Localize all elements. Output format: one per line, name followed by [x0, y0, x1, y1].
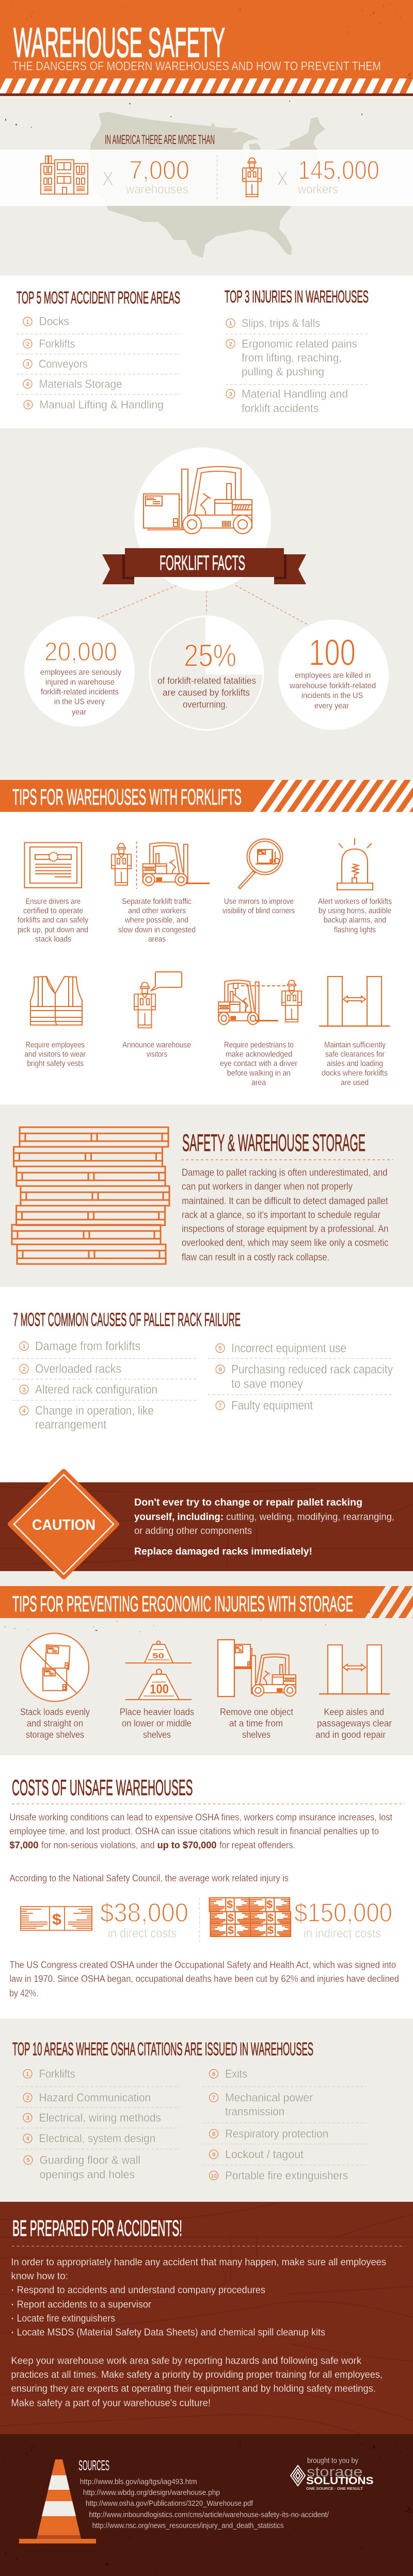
- icon: forklift with box: [144, 467, 252, 534]
- item 5: Incorrect equipment use: [231, 1341, 346, 1355]
- item 9: 9: [212, 2152, 215, 2158]
- header: [0, 0, 413, 135]
- tip: clearances: docks where forklifts: [322, 1069, 388, 1078]
- checklist: Locate MSDS (Material Safety Data Sheets) and chemical spill cleanup kits: [17, 2327, 325, 2338]
- item 8: 8: [212, 2131, 215, 2137]
- item 3: 3: [26, 2115, 29, 2121]
- item 2: pulling & pushing: [242, 365, 324, 378]
- tip: eye contact: eye contact with a driver: [220, 1059, 298, 1068]
- item 4: 4: [22, 1408, 26, 1414]
- tip: certification: pick up, put down and: [18, 926, 88, 934]
- item 4: Change in operation, like: [35, 1404, 154, 1418]
- tip: safety vests: and visitors to wear: [25, 1050, 86, 1059]
- item 7: Mechanical power: [225, 2091, 313, 2104]
- list: accident prone areas: [17, 315, 180, 411]
- item 1: 1: [229, 321, 232, 327]
- panel: safety and warehouse storage: [12, 1127, 393, 1264]
- item 6: Exits: [225, 2068, 247, 2080]
- brought to you by: brought to you by: [307, 2456, 358, 2465]
- tip: one object at a time: Remove one object: [220, 1707, 293, 1717]
- multiply sign: X: [277, 168, 288, 190]
- item 7: transmission: [225, 2105, 284, 2118]
- caution text: yourself, including:: [134, 1512, 224, 1523]
- sources list: [80, 2477, 329, 2530]
- fact: 25% pie: [150, 614, 267, 730]
- item 5: 5: [26, 2157, 30, 2164]
- item 1: [23, 2068, 75, 2080]
- item 1: Slips, trips & falls: [242, 317, 320, 329]
- icon: stack of pallets: [12, 1127, 169, 1264]
- tip: clearances: [319, 977, 390, 1087]
- icon: worker: [243, 158, 261, 197]
- tip: stack evenly: [20, 1633, 90, 1740]
- fact: 20,000: in the US every: [54, 698, 105, 706]
- paragraph: keep safe: practices at all times. Make safety a priority by providing proper training for all employees,: [11, 2370, 383, 2380]
- fact: 100: employees are killed in: [295, 671, 371, 680]
- item 5: [24, 2153, 140, 2181]
- fact: 20,000: 20,000: [44, 637, 117, 666]
- item 2: [226, 338, 357, 378]
- icon: weights: 100: [150, 1682, 169, 1697]
- item 2: 2: [229, 341, 232, 347]
- sources list: http://www.osha.gov/Publications/3220_Warehouse.pdf: [86, 2499, 253, 2508]
- item 9: Lockout / tagout: [225, 2148, 304, 2161]
- tip: mirrors: visibility of blind corners: [223, 906, 295, 916]
- tip: certification: certified to operate: [23, 906, 83, 916]
- tip: alarms: flashing lights: [334, 926, 376, 934]
- paragraph: keep safe: Make safety a part of your warehouse's culture!: [11, 2398, 211, 2409]
- divider: [199, 1898, 200, 1943]
- item 4: Materials Storage: [39, 378, 122, 390]
- tip: clearances: are used: [341, 1079, 369, 1087]
- header rule: [0, 93, 413, 96]
- icon: dollar bill: $: [52, 1911, 61, 1928]
- fact: 100: warehouse forklift-related: [289, 681, 376, 691]
- panel: forklift facts: [24, 447, 389, 730]
- paragraph: OSHA fines: up to $70,000: [157, 1840, 216, 1850]
- panel: costs of unsafe warehouses: COSTS OF UNSAFE WAREHOUSES: [12, 1775, 193, 1800]
- item 3: 3: [229, 391, 232, 397]
- item 7: [210, 2091, 313, 2118]
- tip: certification: [18, 842, 88, 943]
- paragraph: pallet racking: [182, 1167, 388, 1263]
- divider: [217, 155, 218, 200]
- fact: 20,000: injured in warehouse: [45, 678, 115, 686]
- checklist: Respond to accidents and understand company procedures: [17, 2285, 265, 2296]
- caution sign: CAUTION: [32, 1517, 96, 1533]
- panel: be prepared: BE PREPARED FOR ACCIDENTS!: [12, 2216, 182, 2241]
- item 5: 5: [26, 402, 30, 408]
- tip: certification: forklifts and can safely: [18, 916, 88, 925]
- item 2: 2: [26, 341, 29, 347]
- tip: heavier loads: on lower or middle: [122, 1718, 192, 1729]
- item 3: forklift accidents: [242, 402, 319, 415]
- item 1: Docks: [39, 315, 69, 328]
- heading: accident prone areas: TOP 5 MOST ACCIDENT PRONE AREAS: [17, 288, 180, 307]
- connector lines: [98, 585, 310, 626]
- logo: Storage Solutions: SOLUTIONS: [306, 2475, 374, 2487]
- icon: weights: 50: [152, 1652, 164, 1660]
- banner: ergonomic tips: [0, 1586, 413, 1632]
- item 2: Ergonomic related pains: [242, 338, 357, 350]
- list: causes right: [208, 1341, 393, 1413]
- panel: forklift tips: [0, 812, 413, 1105]
- fact: 100: 100: [309, 632, 356, 674]
- icon: stack of dollar bills: $: [227, 1899, 233, 1911]
- icon: worker and forklift separated: [112, 841, 210, 889]
- map of the USA: [88, 112, 325, 258]
- fact: 100: every year: [314, 702, 350, 710]
- paragraph: OSHA fines: $7,000: [9, 1840, 38, 1850]
- icon: stack of dollar bills: $: [228, 1925, 234, 1937]
- icon: stack of dollar bills: [210, 1898, 291, 1937]
- tip: separate traffic: where possible, and: [124, 916, 188, 925]
- tip: alarms: backup alarms, and: [324, 916, 386, 925]
- paragraph: keep safe: [11, 2356, 383, 2409]
- icon: dollar bill: [21, 1907, 92, 1930]
- panel: OSHA citations: [12, 2039, 367, 2182]
- item 4: 4: [26, 381, 29, 388]
- tip: heavier loads: [120, 1641, 194, 1740]
- panel: top lists: [0, 276, 413, 428]
- item 3: 3: [26, 361, 29, 367]
- icon: warehouse building: [41, 156, 88, 194]
- paragraph: OSHA history: by 42%.: [9, 1988, 38, 1998]
- panel: costs of unsafe warehouses: [0, 1755, 413, 2019]
- logo: Storage Solutions: ONE SOURCE · ONE RESULT: [306, 2486, 363, 2491]
- checklist: Report accidents to a supervisor: [17, 2299, 152, 2310]
- paragraph: pallet racking: Damage to pallet racking is often underestimated, and: [182, 1167, 387, 1178]
- item 6: [210, 2068, 247, 2080]
- tip: one object at a time: at a time from: [229, 1718, 283, 1729]
- tip: eye contact: [218, 980, 301, 1087]
- number: 7,000: 7,000: [129, 155, 189, 185]
- caution text: Replace damaged racks immediately!: [134, 1546, 312, 1557]
- tip: mirrors: Use mirrors to improve: [224, 897, 294, 906]
- multiply sign: X: [102, 168, 114, 190]
- tip: heavier loads: Place heavier loads: [120, 1707, 194, 1717]
- caution text: Don't ever try to change or repair pallet racking: [134, 1497, 362, 1508]
- item 5: 5: [218, 1346, 222, 1352]
- item 5: Manual Lifting & Handling: [39, 398, 164, 411]
- icon: forklift driver making eye contact with pedestrian: [218, 980, 301, 1025]
- caution text: [134, 1497, 394, 1557]
- tip: separate traffic: slow down in congested: [118, 926, 196, 934]
- item 8: Respiratory protection: [225, 2127, 328, 2140]
- item 1: Forklifts: [39, 2068, 75, 2080]
- item 4: rearrangement: [35, 1418, 106, 1432]
- icon: stack of dollar bills: $: [267, 1925, 274, 1937]
- caution sign: [10, 1471, 117, 1577]
- icon: traffic cone: [19, 2459, 96, 2543]
- icon: weights: [125, 1641, 192, 1700]
- item 6: Purchasing reduced rack capacity: [231, 1363, 393, 1377]
- list: citations left: [17, 2068, 180, 2181]
- tip: safety vests: Require employees: [26, 1041, 85, 1050]
- logo: Storage Solutions: [291, 2464, 374, 2491]
- number: direct cost: $38,000: [100, 1898, 188, 1927]
- caution text: cutting, welding, modifying, rearranging,: [226, 1512, 394, 1523]
- icon: magnifier: [239, 839, 283, 889]
- paragraph: employees know how to: In order to appropriately handle any accident that many happen, make sure all employees: [11, 2257, 386, 2268]
- icon: aisle clearance: [319, 1645, 390, 1694]
- stripes: [382, 1586, 413, 1618]
- paragraph: keep safe: ensuring they are experts at operating their equipment and by holding safety meetings.: [11, 2383, 376, 2394]
- paragraph: OSHA history: [9, 1960, 399, 1998]
- item 3: Altered rack configuration: [35, 1383, 157, 1397]
- item 3: Material Handling and: [242, 387, 348, 401]
- label: direct cost: in direct costs: [108, 1926, 177, 1941]
- tip: eye contact: before walking in an: [227, 1069, 291, 1078]
- tip: clearances: safe clearances for: [325, 1050, 385, 1059]
- tip: announce visitors: Announce warehouse: [122, 1041, 191, 1050]
- icon: stack of dollar bills: $: [228, 1912, 234, 1924]
- paragraph: OSHA fines: employee time, and lost product. OSHA can issue citations which result in financial penalties up to: [9, 1826, 379, 1836]
- caution text: or adding other components: [134, 1526, 252, 1537]
- label: workers: workers: [297, 182, 338, 197]
- icon: certificate: [25, 842, 82, 888]
- item 6: 6: [212, 2071, 215, 2077]
- panel: America stats: IN AMERICA THERE ARE MORE THAN: [105, 133, 215, 147]
- item 7: Faulty equipment: [231, 1399, 313, 1413]
- banner: forklift facts: [102, 548, 306, 584]
- tip: stack evenly: Stack loads evenly: [20, 1707, 90, 1717]
- tip: clearances: aisles and loading: [327, 1059, 383, 1068]
- paragraph: employees know how to: know how to:: [11, 2271, 68, 2282]
- sources list: http://www.wbdg.org/design/warehouse.php: [83, 2488, 220, 2497]
- item 4: [20, 1404, 154, 1432]
- panel: footer: [0, 2434, 413, 2576]
- list: injuries: [226, 317, 368, 415]
- tip: clear aisles: Keep aisles and: [324, 1707, 384, 1717]
- tip: alarms: by using horns, audible: [319, 906, 391, 916]
- banner: forklift facts: FORKLIFT FACTS: [160, 552, 245, 574]
- item 2: 2: [22, 1366, 26, 1372]
- text: National Safety Council: According to the National Safety Council, the average work related injury is: [9, 1873, 289, 1883]
- fact: 25% pie: are caused by forklifts: [163, 687, 250, 698]
- item 6: to save money: [231, 1377, 303, 1391]
- fact: 20,000: forklift-related incidents: [41, 687, 119, 697]
- tip: safety vests: bright safety vests: [27, 1059, 84, 1068]
- item 1: 1: [22, 1343, 26, 1350]
- item 5: Guarding floor & wall: [39, 2153, 140, 2167]
- item 2: from lifting, reaching,: [242, 351, 342, 364]
- tip: alarms: [318, 838, 392, 934]
- fact: 25% pie: 25%: [184, 638, 236, 673]
- icon: stack of dollar bills: $: [267, 1912, 274, 1924]
- tip: eye contact: area: [251, 1079, 266, 1087]
- tip: separate traffic: areas: [148, 935, 166, 943]
- stripes: [264, 780, 413, 812]
- item 2: Forklifts: [39, 338, 75, 350]
- tip: announce visitors: [122, 972, 191, 1059]
- tip: mirrors: [223, 839, 295, 916]
- icon: crooked boxes prohibited: [21, 1633, 89, 1701]
- fact: 100: [278, 619, 389, 730]
- tip: stack evenly: storage shelves: [26, 1730, 84, 1740]
- panel: pallet rack failure causes: [0, 1287, 413, 1482]
- tip: clear aisles: [315, 1645, 392, 1740]
- icon: safety vest: [30, 977, 82, 1025]
- checklist: [12, 2285, 325, 2338]
- circle behind forklift: [134, 447, 271, 591]
- sources list: http://www.bls.gov/iag/tgs/iag493.htm: [80, 2477, 197, 2486]
- label: warehouses: warehouses: [125, 182, 188, 197]
- item 2: Hazard Communication: [39, 2091, 151, 2104]
- item 1: 1: [26, 319, 29, 325]
- logo: Storage Solutions: storage: [307, 2464, 362, 2479]
- tip: clear aisles: and in good repair: [315, 1730, 386, 1740]
- paragraph: OSHA fines: for non-serious violations, and: [41, 1840, 155, 1850]
- tip: eye contact: Require pedestrians to: [224, 1041, 294, 1050]
- icon: worker with speech bubble: [134, 972, 182, 1028]
- item 1: [23, 315, 69, 328]
- item 3: 3: [22, 1387, 26, 1393]
- paragraph: pallet racking: can put workers in danger when not properly: [182, 1181, 353, 1192]
- paragraph: OSHA fines: for repeat offenders.: [219, 1840, 295, 1850]
- fact: 20,000: year: [72, 708, 87, 716]
- paragraph: pallet racking: maintained. It can be difficult to detect damaged pallet: [182, 1196, 388, 1207]
- item 6: [216, 1363, 393, 1391]
- item 2: [23, 338, 75, 350]
- paragraph: pallet racking: rack at a glance, so it's important to schedule regular: [182, 1210, 381, 1221]
- item 3: Conveyors: [39, 357, 88, 371]
- number: indirect cost: $150,000: [294, 1898, 392, 1927]
- fact: 100: incidents in the US: [301, 692, 363, 700]
- number: 145,000: 145,000: [298, 155, 379, 185]
- sources list: http://www.nsc.org/news_resources/injury_and_death_statistics: [92, 2521, 284, 2530]
- paragraph: pallet racking: flaw can result in a costly rack collapse.: [182, 1252, 329, 1263]
- paragraph: OSHA fines: [9, 1812, 392, 1850]
- item 3: Electrical, wiring methods: [39, 2111, 161, 2124]
- fact: 25% pie: of forklift-related fatalities: [157, 676, 256, 686]
- tip: certification: stack loads: [35, 935, 71, 943]
- icon: forklift at shelf: [218, 1640, 296, 1697]
- tip: eye contact: make acknowledged: [226, 1050, 292, 1059]
- list: citations right: [202, 2068, 367, 2182]
- tip: one object at a time: [218, 1640, 296, 1740]
- item 10: Portable fire extinguishers: [225, 2169, 348, 2182]
- item 6: 6: [218, 1367, 222, 1373]
- tip: separate traffic: Separate forklift traffic: [122, 897, 192, 906]
- tip: one object at a time: shelves: [242, 1730, 271, 1740]
- panel: caution: [0, 1471, 413, 1577]
- list: causes left: [12, 1339, 196, 1432]
- panel: footer: SOURCES: [78, 2457, 109, 2473]
- tip: alarms: Alert workers of forklifts: [318, 897, 392, 906]
- fact: 20,000: employees are seriously: [40, 668, 121, 677]
- tip: announce visitors: visitors: [147, 1050, 167, 1059]
- icon: stack of dollar bills: $: [266, 1899, 273, 1911]
- tip: stack evenly: and straight on: [27, 1718, 83, 1729]
- paragraph: employees know how to: [11, 2257, 386, 2282]
- tip: separate traffic: and other workers: [128, 906, 186, 916]
- icon: alarm light: [337, 838, 373, 890]
- panel: ergonomic tips: [20, 1633, 392, 1740]
- tip: safety vests: [25, 977, 86, 1068]
- item 1: 1: [26, 2071, 29, 2077]
- item 7: 7: [218, 1403, 222, 1409]
- paragraph: pallet racking: inspections of storage equipment by a professional. An: [182, 1224, 388, 1235]
- icon: aisle clearance: [319, 977, 390, 1026]
- item 10: 10: [211, 2173, 217, 2179]
- hazard stripes: [0, 78, 413, 93]
- tip: clearances: Maintain sufficiently: [324, 1041, 386, 1050]
- white stat band: [0, 150, 413, 206]
- item 4: Electrical, system design: [39, 2132, 155, 2145]
- fact: 20,000: [24, 616, 135, 727]
- item 7: 7: [212, 2095, 215, 2101]
- paragraph: keep safe: Keep your warehouse work area safe by reporting hazards and following safe work: [11, 2356, 361, 2366]
- sources list: http://www.inboundlogistics.com/cms/article/warehouse-safety-its-no-accident/: [89, 2510, 329, 2519]
- item 2: Overloaded racks: [35, 1362, 121, 1376]
- label: indirect cost: in indirect costs: [304, 1926, 381, 1941]
- tip: certification: Ensure drivers are: [26, 897, 81, 906]
- item 3: [226, 387, 348, 415]
- tip: heavier loads: shelves: [143, 1730, 171, 1740]
- item 2: 2: [26, 2095, 29, 2101]
- banner: tips for warehouses with forklifts: [0, 780, 413, 826]
- tip: clear aisles: passageways clear: [317, 1718, 392, 1729]
- tip: separate traffic: [112, 841, 210, 943]
- item 5: openings and holes: [39, 2168, 135, 2181]
- checklist: Locate fire extinguishers: [17, 2313, 115, 2324]
- panel: America stats: [0, 112, 413, 258]
- item 1: Damage from forklifts: [35, 1339, 140, 1353]
- paragraph: pallet racking: overlooked dent, which may seem like only a cosmetic: [182, 1238, 388, 1249]
- panel: be prepared: [0, 2202, 413, 2434]
- item 4: 4: [26, 2136, 29, 2142]
- fact: 25% pie: overturning.: [183, 699, 228, 710]
